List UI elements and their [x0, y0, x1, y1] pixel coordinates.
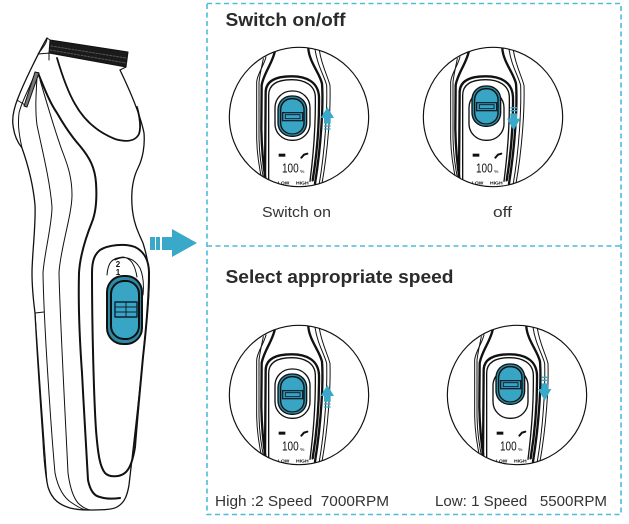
speed labels: 1 — [116, 268, 121, 277]
screen readout: HIGH — [490, 181, 503, 187]
arrow: big right arrow — [150, 229, 197, 257]
circle: low speed — [447, 325, 587, 465]
heading: select speed: Select appropriate speed — [226, 266, 454, 287]
screen readout: HIGH — [296, 459, 309, 465]
circle: high speed — [229, 325, 369, 465]
screen readout: HIGH — [296, 181, 309, 187]
thin side lines — [36, 77, 87, 510]
circle: switch on — [229, 47, 369, 187]
caption: off: off — [493, 205, 513, 221]
caption: switch on: Switch on — [262, 205, 331, 221]
circle: switch off — [423, 47, 563, 187]
side strip — [24, 72, 39, 107]
screen readout — [278, 164, 308, 184]
screen readout: HIGH — [514, 459, 527, 465]
arrow: up — [321, 385, 334, 408]
speed labels — [116, 260, 121, 277]
screen readout: % — [518, 447, 523, 453]
screen readout — [278, 442, 308, 462]
screen readout: 100 — [476, 162, 493, 176]
heading: switch on/off: Switch on/off — [226, 9, 346, 30]
screen readout: % — [494, 169, 499, 175]
grip panel — [92, 245, 149, 476]
screen readout — [472, 164, 502, 184]
screen readout: % — [300, 447, 305, 453]
screen readout: 100 — [282, 440, 299, 454]
arrow: up — [321, 107, 334, 130]
screen readout: LOW — [496, 459, 508, 465]
screen readout: LOW — [472, 181, 484, 187]
dashed panel frame — [207, 4, 621, 514]
screen readout: LOW — [278, 459, 290, 465]
switch track — [107, 257, 143, 295]
body contour — [38, 73, 120, 499]
screen readout: 100 — [500, 440, 517, 454]
blade head — [49, 40, 128, 67]
screen readout — [496, 442, 526, 462]
arrow: down — [538, 377, 551, 401]
speed labels: 2 — [116, 260, 121, 269]
screen readout: % — [300, 169, 305, 175]
screen readout: 100 — [282, 162, 299, 176]
switch — [106, 275, 143, 345]
screen readout: LOW — [278, 181, 290, 187]
illustration: hair trimmer — [13, 38, 149, 510]
head window — [57, 58, 140, 141]
caption: high speed: High :2 Speed 7000RPM — [215, 494, 389, 510]
arrow: down — [507, 107, 520, 130]
caption: low speed: Low: 1 Speed 5500RPM — [435, 494, 607, 510]
